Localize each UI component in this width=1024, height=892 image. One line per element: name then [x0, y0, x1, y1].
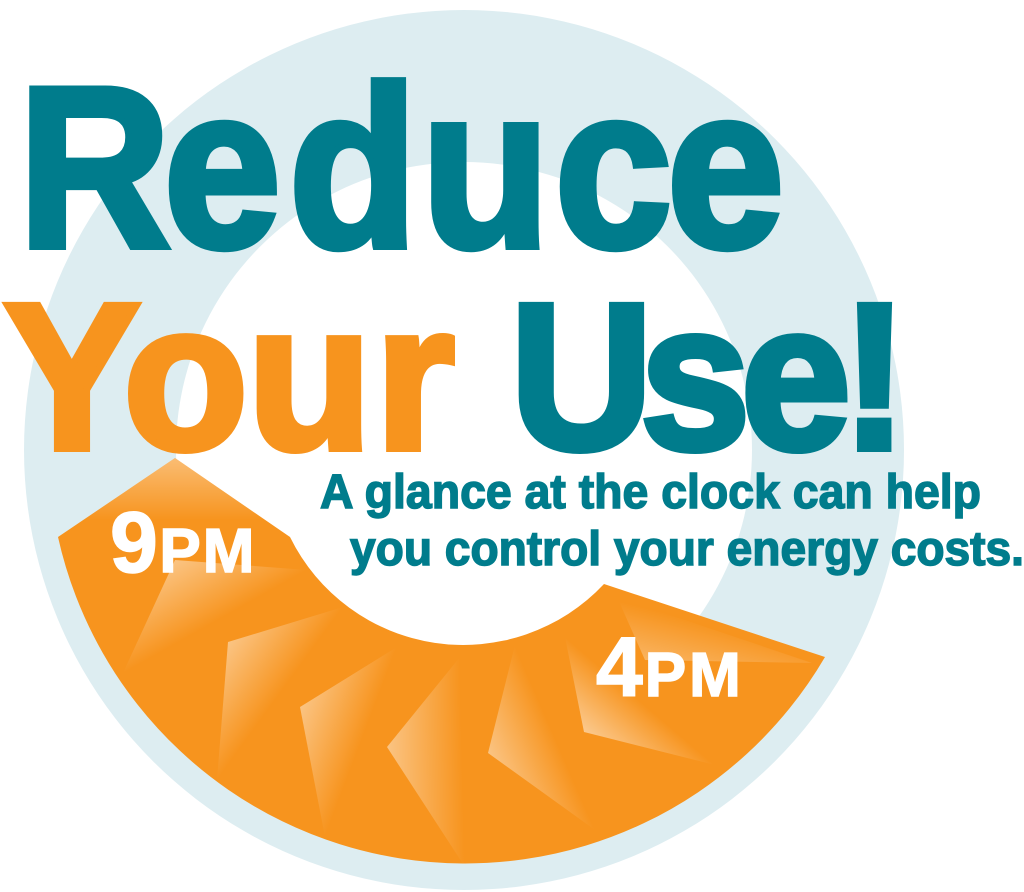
- panel: orange 4PM to 9PM clock segment: [58, 458, 825, 867]
- title: Your: Your: [4, 261, 455, 493]
- subtitle: [320, 466, 1024, 576]
- subtitle: A glance at the clock can help: [320, 466, 981, 519]
- orange arc band: [58, 458, 825, 863]
- label: 4PM: 4PM: [596, 620, 744, 714]
- light chevron facets: [58, 458, 812, 867]
- title: Reduce: Reduce: [18, 39, 784, 295]
- title: Use!: Use!: [510, 260, 908, 493]
- label: 9PM: 9PM: [110, 495, 256, 591]
